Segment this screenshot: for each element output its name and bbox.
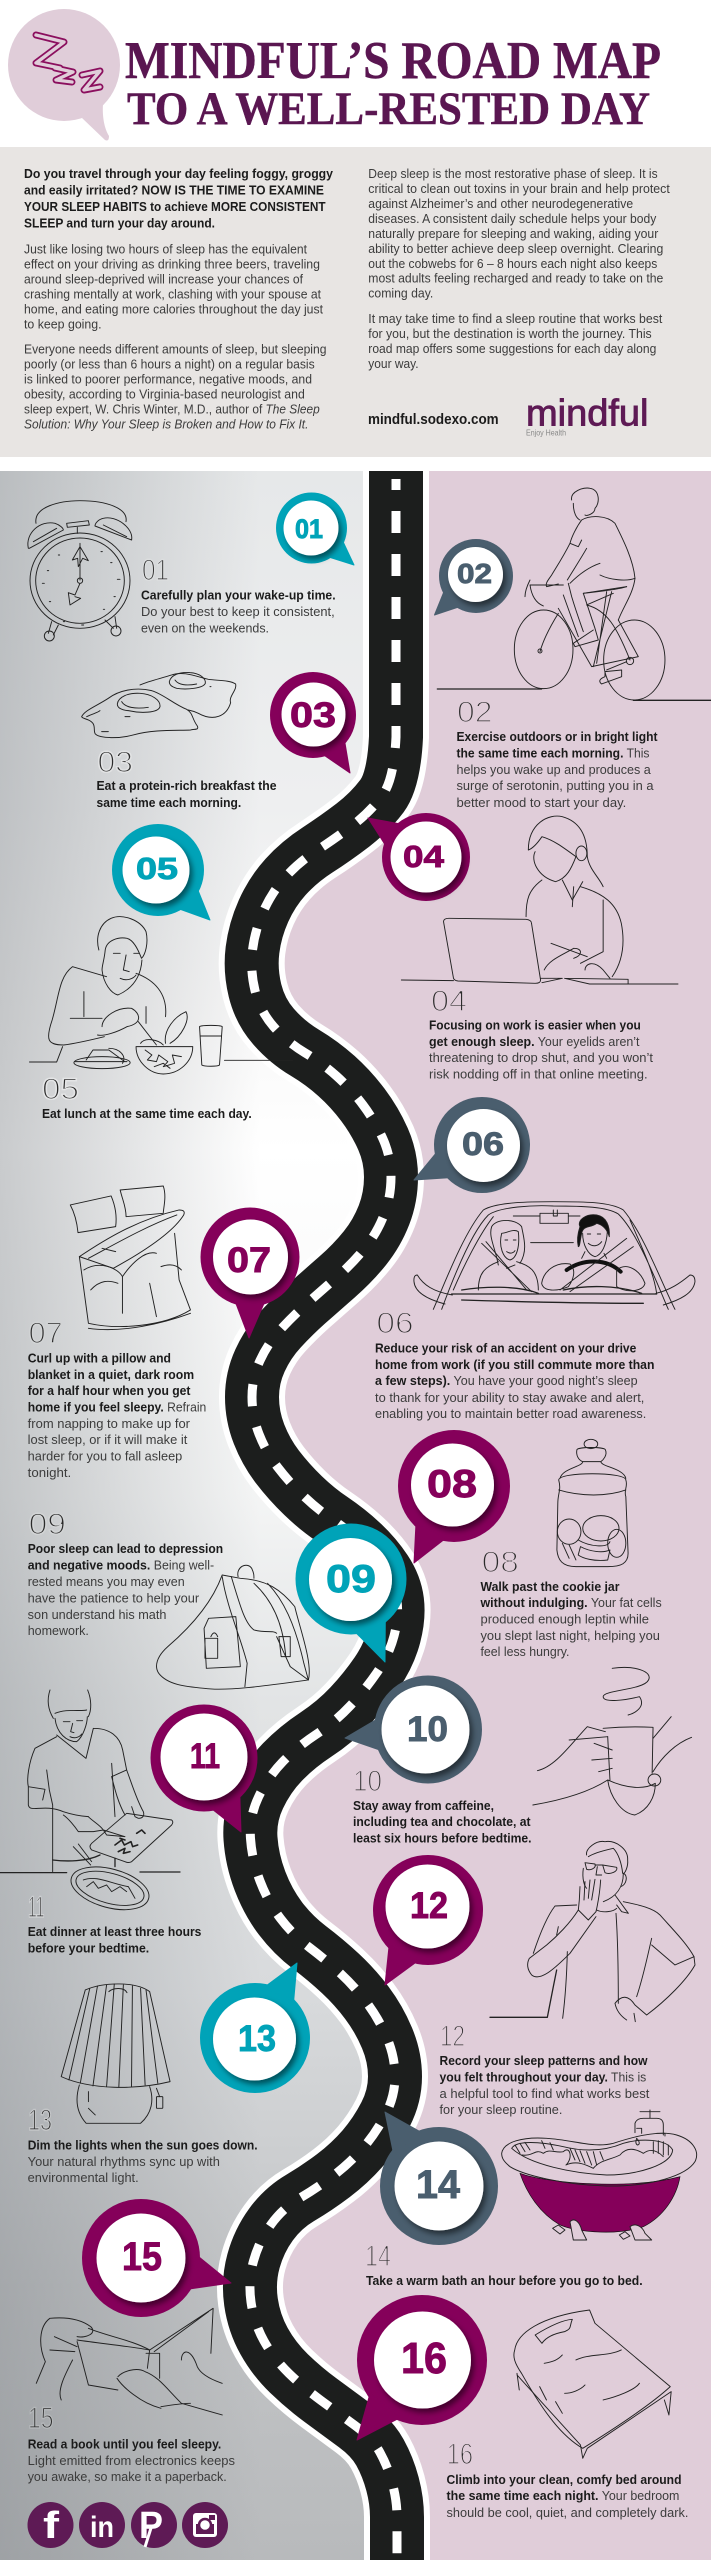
tip 09 text: have the patience to help your (28, 1592, 199, 1606)
tip 08 text (480, 1546, 662, 1659)
marker 13 (200, 1963, 310, 2093)
tip 14 text (365, 2240, 643, 2288)
tip 10 text: least six hours before bedtime. (353, 1832, 532, 1846)
tip 16 text (446, 2438, 688, 2520)
icon: linkedin (79, 2502, 125, 2548)
tip 07 text: tonight. (28, 1466, 71, 1480)
icon: facebook: f (43, 2505, 59, 2547)
tip 02 text: better mood to start your day. (456, 796, 626, 810)
icon: cookie jar (557, 1439, 628, 1567)
tip 13 text: Your natural rhythms sync up with (28, 2155, 220, 2169)
marker 06: 06 (462, 1126, 504, 1162)
tip 02 text (456, 696, 658, 810)
marker 08 (398, 1430, 510, 1563)
social icons (28, 2502, 228, 2548)
tip 03 text: Eat a protein-rich breakfast the (96, 779, 276, 793)
tip 16 text: the same time each night. Your bedroom (446, 2489, 679, 2503)
panel: introduction (0, 147, 711, 457)
icon: instagram (182, 2502, 228, 2548)
icon: linkedin: in (90, 2511, 114, 2544)
title: TO A WELL-RESTED DAY (127, 83, 650, 135)
icon: pinterest: P (139, 2505, 163, 2547)
marker 06 (414, 1097, 530, 1193)
icon: bed (514, 2310, 671, 2458)
marker 03 (270, 672, 356, 773)
text block: intro right column: It may take time to find a sleep routine that works best (368, 312, 663, 326)
icon: table lamp (61, 1984, 170, 2123)
marker 10: 10 (407, 1710, 448, 1749)
tip 09 text: homework. (28, 1624, 89, 1638)
text block: intro left column: around sleep-deprived will increase your chances of (24, 272, 303, 286)
tip 01 text: 01 (142, 554, 169, 587)
text block: intro left column: crashing mentally at work, clashing with your spouse at (24, 288, 321, 302)
tip 06 text: Reduce your risk of an accident on your drive (375, 1342, 636, 1356)
tip 15 text: Light emitted from electronics keeps (28, 2454, 235, 2468)
tip 03 text: same time each morning. (96, 796, 241, 810)
text block: intro left column: YOUR SLEEP HABITS to achieve MORE CONSISTENT (24, 200, 326, 214)
tip 01 text: even on the weekends. (141, 622, 269, 636)
tip 13 text: 13 (28, 2104, 52, 2137)
icon: bathtub (502, 2110, 697, 2240)
tip 08 text: feel less hungry. (480, 1645, 570, 1659)
text block: intro left column: is linked to poorer performance, negative moods, and (24, 372, 312, 386)
text block: intro left column: Solution: Why Your Sleep is Broken and How to Fix It. (24, 418, 308, 432)
icon: pillows and blanket (70, 1186, 190, 1330)
tip 04 text: threatening to drop shut, and you won’t (429, 1051, 654, 1065)
tip 11 text: Eat dinner at least three hours (28, 1925, 201, 1939)
marker 01: 01 (295, 514, 323, 544)
tip 14 text: Take a warm bath an hour before you go to bed. (366, 2274, 643, 2288)
tip 13 text: environmental light. (28, 2171, 139, 2185)
text block: intro right column: Deep sleep is the most restorative phase of sleep. It is (368, 167, 658, 181)
icon: woman at laptop (401, 816, 678, 984)
marker 12 (373, 1855, 483, 1985)
text block: intro right column: coming day. (368, 286, 433, 300)
icon: yawning man (490, 1841, 695, 2022)
tip 10 text: including tea and chocolate, at (353, 1815, 531, 1829)
marker 10 (345, 1676, 482, 1784)
text block: intro left column: obesity, according to Virginia-based neurologist and (24, 388, 305, 402)
marker 11: 11 (190, 1737, 220, 1776)
tip 04 text: Focusing on work is easier when you (429, 1018, 641, 1032)
marker 14 (380, 2112, 498, 2245)
icon: pinterest (131, 2502, 177, 2548)
title (125, 32, 661, 135)
text block: intro left column: home, and eating more calories throughout the day just (24, 302, 323, 316)
tip 11 text (28, 1891, 201, 1956)
tip 12 text: 12 (440, 2020, 465, 2053)
text block: intro left column: effect on your driving as drinking three beers, traveling (24, 258, 320, 272)
icon: facebook (28, 2502, 74, 2548)
tip 14 text: 14 (365, 2240, 391, 2273)
icon: man eating salad (29, 917, 293, 1074)
tip 02 text: 02 (457, 696, 492, 729)
tip 16 text: 16 (447, 2438, 473, 2471)
marker 05 (112, 824, 210, 920)
tip 11 text: before your bedtime. (28, 1942, 149, 1956)
tip 07 text: 07 (29, 1317, 63, 1350)
tip 07 text: harder for you to fall asleep (28, 1450, 182, 1464)
tip 09 text: rested means you may even (28, 1575, 185, 1589)
tip 06 text (375, 1307, 654, 1421)
tip 15 text: you awake, so make it a paperback. (28, 2470, 227, 2484)
tip 07 text: from napping to make up for (28, 1417, 190, 1431)
website url: mindful.sodexo.com (368, 411, 499, 428)
title: MINDFUL’S ROAD MAP (125, 32, 661, 90)
text block: intro left column (24, 167, 333, 432)
tip 01 text: Do your best to keep it consistent, (141, 605, 335, 619)
marker 01 (276, 492, 354, 565)
text block: intro right column: against Alzheimer’s and other neurodegenerative (368, 197, 633, 211)
text block: intro right column: road map offers some suggestions for each day along (368, 342, 656, 356)
text block: intro right column: critical to clean out toxins in your brain and help protect (368, 182, 670, 196)
marker 16: 16 (401, 2334, 447, 2383)
text block: intro left column: Everyone needs different amounts of sleep, but sleeping (24, 342, 326, 356)
tip 07 text: home if you feel sleepy. Refrain (28, 1400, 206, 1414)
marker 03: 03 (290, 696, 336, 735)
icon: backpack (157, 1565, 309, 1689)
tip 02 text: helps you wake up and produces a (456, 763, 651, 777)
tip 02 text: the same time each morning. This (456, 746, 650, 760)
marker 02 (434, 539, 513, 615)
tip 04 text: risk nodding off in that online meeting. (429, 1068, 648, 1082)
tip 07 text: lost sleep, or if it will make it (28, 1433, 188, 1447)
icon: speech bubble with Zzz (8, 9, 120, 140)
tip 07 text: blanket in a quiet, dark room (28, 1368, 194, 1382)
tip 13 text: Dim the lights when the sun goes down. (28, 2138, 258, 2152)
tip 07 text: for a half hour when you get (28, 1384, 191, 1398)
tip 12 text: you felt throughout your day. This is (440, 2070, 646, 2084)
icon: fried eggs (82, 672, 236, 738)
logo: mindful: Enjoy Health (526, 428, 566, 438)
marker 07: 07 (227, 1241, 271, 1280)
text block: intro left column: and easily irritated? NOW IS THE TIME TO EXAMINE (24, 184, 324, 198)
icon: alarm clock (28, 501, 132, 641)
text block: intro right column (368, 167, 670, 371)
tip 06 text: to thank for your ability to stay awake and alert, (375, 1391, 644, 1405)
text block: intro left column: to keep going. (24, 318, 102, 332)
tip 02 text: surge of serotonin, putting you in a (456, 779, 654, 793)
tip 09 text: son understand his math (28, 1608, 166, 1622)
logo: mindful: mindful (526, 392, 648, 434)
tip 15 text: 15 (28, 2402, 54, 2435)
tip 04 text: get enough sleep. Your eyelids aren’t (429, 1035, 640, 1049)
tip 04 text (429, 985, 654, 1082)
marker 04 (368, 813, 470, 901)
tip 05 text: Eat lunch at the same time each day. (42, 1107, 252, 1121)
tip 12 text: a helpful tool to find what works best (440, 2087, 650, 2101)
tip 01 text (141, 554, 336, 636)
tip 10 text (353, 1765, 532, 1846)
tip 12 text: for your sleep routine. (440, 2103, 562, 2117)
icon: cyclist (437, 488, 711, 700)
tip 15 text (28, 2402, 235, 2484)
header: title band (8, 9, 661, 140)
tip 10 text: Stay away from caffeine, (353, 1799, 494, 1813)
text block: intro right column: for you, but the destination is worth the journey. This (368, 327, 652, 341)
tip 12 text: Record your sleep patterns and how (440, 2054, 648, 2068)
marker 14: 14 (416, 2163, 461, 2207)
tip 06 text: home from work (if you still commute more than (375, 1358, 654, 1372)
tip 16 text: Climb into your clean, comfy bed around (446, 2473, 682, 2487)
tip 03 text (96, 746, 276, 810)
text block: intro left column: sleep expert, W. Chris Winter, M.D., author of The Sleep (24, 402, 320, 416)
tip 09 text (28, 1508, 223, 1638)
text block: intro left column: poorly (or less than 6 hours a night) on a regular basis (24, 358, 315, 372)
text block: intro left column: Do you travel through your day feeling foggy, groggy (24, 167, 333, 181)
tip 08 text: without indulging. Your fat cells (480, 1596, 662, 1610)
tip 15 text: Read a book until you feel sleepy. (28, 2438, 221, 2452)
text block: intro right column: diseases. A consistent daily schedule helps your body (368, 212, 657, 226)
tip 05 text (42, 1073, 252, 1121)
tip 06 text: a few steps). You have your good night’s sleep (375, 1374, 638, 1388)
tip 02 text: Exercise outdoors or in bright light (456, 730, 658, 744)
marker 05: 05 (136, 851, 178, 886)
marker 15 (82, 2199, 231, 2317)
tip 01 text: Carefully plan your wake-up time. (141, 588, 336, 602)
marker 15: 15 (122, 2235, 162, 2279)
tip 08 text: Walk past the cookie jar (480, 1580, 620, 1594)
marker 09: 09 (326, 1558, 376, 1601)
tip 06 text: enabling you to maintain better road awareness. (375, 1407, 646, 1421)
tip 12 text (440, 2020, 650, 2117)
text block: intro right column: naturally prepare for sleeping and waking, aiding your (368, 227, 658, 241)
tip 07 text (28, 1317, 206, 1480)
tip 08 text: 08 (482, 1546, 519, 1579)
marker 02: 02 (457, 558, 492, 589)
tip 10 text: 10 (353, 1765, 382, 1798)
text block: intro left column: SLEEP and turn your day around. (24, 216, 215, 230)
text block: intro right column: your way. (368, 357, 419, 371)
tip 05 text: 05 (42, 1073, 79, 1106)
marker 13: 13 (238, 2018, 276, 2059)
tip 09 text: and negative moods. Being well- (28, 1558, 214, 1572)
tip 09 text: 09 (29, 1508, 66, 1541)
marker 09 (296, 1524, 406, 1662)
marker 07 (200, 1208, 300, 1338)
marker 04: 04 (403, 839, 445, 874)
tip 08 text: you slept last night, helping you (480, 1629, 660, 1643)
icon: car with couple (414, 1202, 695, 1309)
tip 06 text: 06 (376, 1307, 414, 1340)
icon: hand holding a mug (533, 1667, 692, 1815)
text block: intro left column: Just like losing two hours of sleep has the equivalent (24, 242, 307, 256)
tip 16 text: should be cool, quiet, and completely dark. (446, 2506, 688, 2520)
winding road (250, 471, 398, 2560)
tip 11 text: 11 (28, 1891, 44, 1924)
tip 09 text: Poor sleep can lead to depression (28, 1542, 223, 1556)
marker 08: 08 (427, 1463, 477, 1506)
tip 07 text: Curl up with a pillow and (28, 1352, 171, 1366)
tip 13 text (28, 2104, 258, 2185)
tip 08 text: produced enough leptin while (480, 1612, 649, 1626)
marker 12: 12 (410, 1885, 448, 1926)
tip 04 text: 04 (431, 985, 467, 1018)
icon: hands holding a book (36, 2308, 222, 2415)
icon: man chopping vegetables (0, 1690, 180, 1917)
marker 16 (357, 2295, 487, 2440)
text block: intro right column: ability to better achieve deep sleep overnight. Clearing (368, 242, 663, 256)
marker 11 (150, 1704, 258, 1832)
text block: intro right column: out the cobwebs for 6 – 8 hours each night also keeps (368, 257, 657, 271)
tip 03 text: 03 (98, 746, 133, 779)
text block: intro right column: most adults feeling recharged and ready to take on the (368, 272, 663, 286)
